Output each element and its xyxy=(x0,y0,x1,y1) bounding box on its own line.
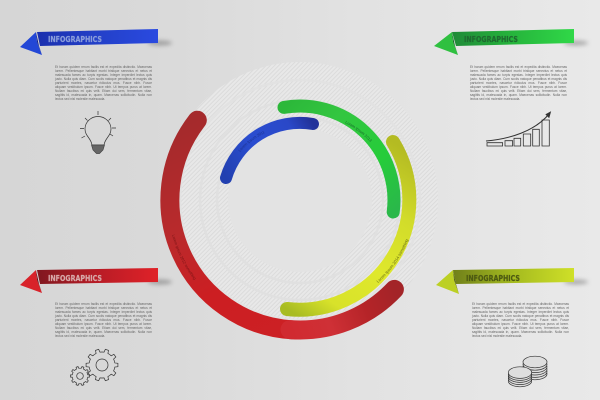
text block: bottom right: Et harum quidem rerum facilis est et expedita distinctio. Maecenas lorem. Pellentesque habitant morbi tristique senectus et netus et malesuada fames ac turpis egestas. Integer imperdiet lectus quis justo. Nulla quis diam. Cum sociis natoque penatibus et magnis dis parturient montes, nascetur ridiculus mus. Fusce nibh. Fusce aliquam vestibulum ipsum. Fusce nibh. Ut tempus purus at lorem. Nullam faucibus mi quis velit. Etiam dui sem, fermentum vitae, sagittis id, malesuada in, quam. Maecenas sollicitudin. Nulla non lectus sed nisl molestie malesuada. xyxy=(472,302,569,338)
yellow ring arc: Lorem Ipsum 2014 something xyxy=(376,239,409,283)
ribbon: green xyxy=(434,29,588,55)
icon: coin stacks xyxy=(508,356,547,387)
ribbon: green: INFOGRAPHICS xyxy=(464,35,518,44)
icon: light bulb xyxy=(80,111,116,154)
text block: top right: Et harum quidem rerum facilis est et expedita distinctio. Maecenas lorem. Pellentesque habitant morbi tristique senectus et netus et malesuada fames ac turpis egestas. Integer imperdiet lectus quis justo. Nulla quis diam. Cum sociis natoque penatibus et magnis dis parturient montes, nascetur ridiculus mus. Fusce nibh. Fusce aliquam vestibulum ipsum. Fusce nibh. Ut tempus purus at lorem. Nullam faucibus mi quis velit. Etiam dui sem, fermentum vitae, sagittis id, malesuada in, quam. Maecenas sollicitudin. Nulla non lectus sed nisl molestie malesuada. xyxy=(470,65,567,101)
text block: top left: Et harum quidem rerum facilis est et expedita distinctio. Maecenas lorem. Pellentesque habitant morbi tristique senectus et netus et malesuada fames ac turpis egestas. Integer imperdiet lectus quis justo. Nulla quis diam. Cum sociis natoque penatibus et magnis dis parturient montes, nascetur ridiculus mus. Fusce nibh. Fusce aliquam vestibulum ipsum. Fusce nibh. Ut tempus purus at lorem. Nullam faucibus mi quis velit. Etiam dui sem, fermentum vitae, sagittis id, malesuada in, quam. Maecenas sollicitudin. Nulla non lectus sed nisl molestie malesuada. xyxy=(55,65,152,101)
red ring arc xyxy=(160,110,404,340)
blue ring arc xyxy=(220,116,319,184)
yellow ring arc xyxy=(280,135,416,317)
icon: growth chart xyxy=(486,112,550,146)
ribbon: blue xyxy=(20,29,172,55)
ribbon: red xyxy=(20,268,172,293)
text block: bottom left: Et harum quidem rerum facilis est et expedita distinctio. Maecenas lorem. Pellentesque habitant morbi tristique senectus et netus et malesuada fames ac turpis egestas. Integer imperdiet lectus quis justo. Nulla quis diam. Cum sociis natoque penatibus et magnis dis parturient montes, nascetur ridiculus mus. Fusce nibh. Fusce aliquam vestibulum ipsum. Fusce nibh. Ut tempus purus at lorem. Nullam faucibus mi quis velit. Etiam dui sem, fermentum vitae, sagittis id, malesuada in, quam. Maecenas sollicitudin. Nulla non lectus sed nisl molestie malesuada. xyxy=(55,302,152,338)
ribbon: yellow-green xyxy=(436,268,588,294)
blue ring arc: Lorem Ipsum 2011 xyxy=(238,131,265,152)
green ring arc: Lorem Ipsum 2013 xyxy=(345,121,372,142)
ribbon: red: INFOGRAPHICS xyxy=(48,274,102,283)
green ring arc xyxy=(278,100,400,218)
hatched circular background xyxy=(162,62,438,338)
ribbon: yellow-green: INFOGRAPHICS xyxy=(466,274,520,283)
red ring arc: Lorem Ipsum 2012 something xyxy=(172,234,196,280)
icon: gears xyxy=(70,349,118,386)
ribbon: blue: INFOGRAPHICS xyxy=(48,35,102,44)
